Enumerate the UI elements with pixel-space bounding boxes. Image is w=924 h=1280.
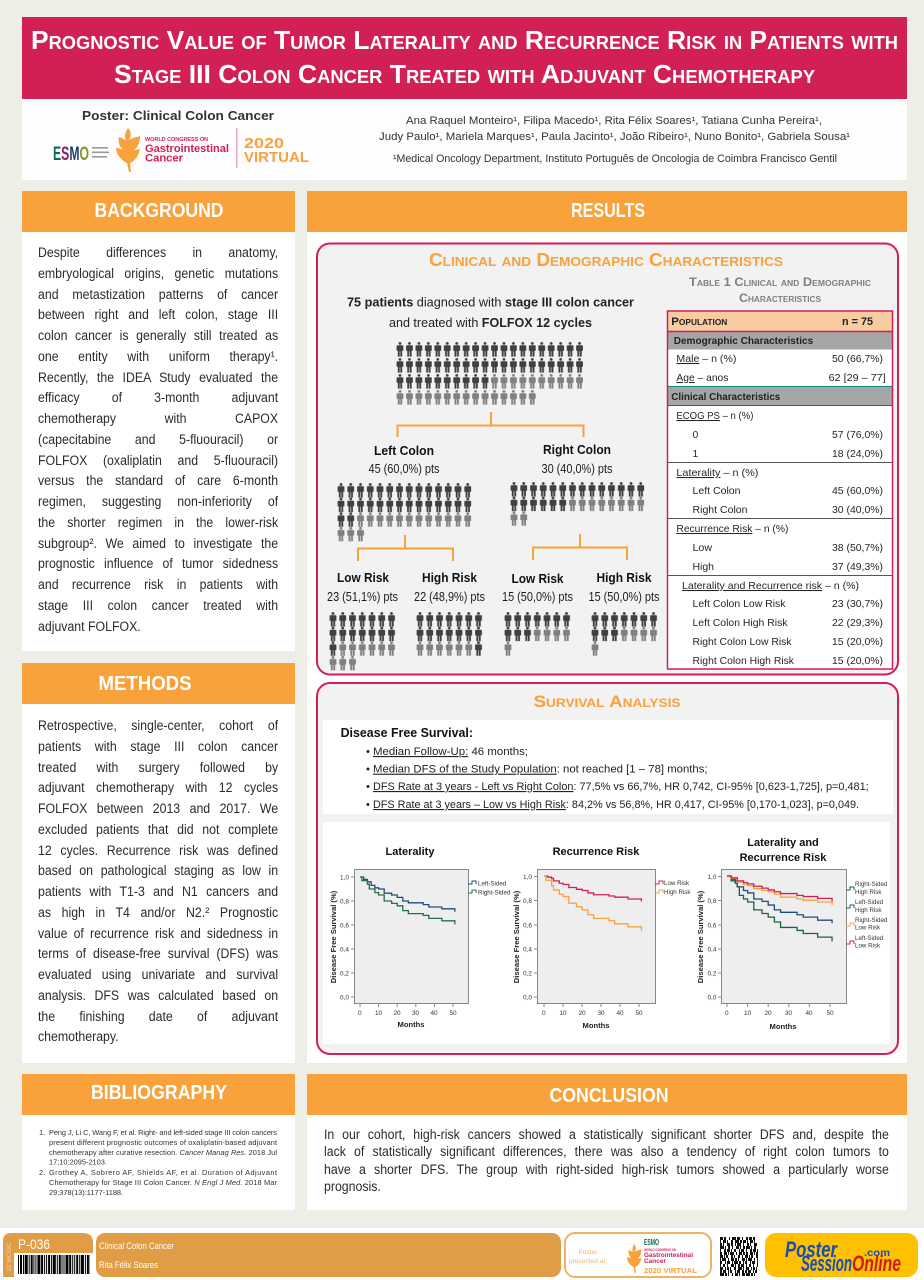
title banner: Stage III Colon Cancer Treated with Adjuvant Chemotherapy [114, 59, 815, 89]
right colon low risk [502, 572, 573, 656]
subheading: Clinical and Demographic Characteristics [429, 250, 783, 270]
chart: recurrence risk: 30 [598, 1010, 605, 1017]
logo: ESMO and World Congress: ESMO [53, 144, 89, 165]
panel: methods [22, 663, 295, 1063]
chart: recurrence risk: 10 [560, 1010, 567, 1017]
background text: and recurrence risk in patients with [38, 577, 278, 592]
chart: laterality and recurrence risk: High Risk [855, 907, 882, 914]
logo: ESMO and World Congress [53, 128, 309, 172]
authors: ¹Medical Oncology Department, Instituto Português de Oncologia de Coimbra Francisco Gentil [393, 153, 837, 165]
survival summary: DFS Rate at 3 years - Left vs Right Colon: 77,5% vs 66,7%, HR 0,742, CI-95% [0,623-1,725], p=0,481; [373, 781, 869, 793]
panel: survival analysis [317, 683, 898, 1054]
heading: bibliography: BIBLIOGRAPHY [91, 1082, 228, 1104]
table 1: Left Colon [692, 486, 741, 497]
chart: recurrence risk: Recurrence Risk [553, 846, 640, 858]
table 1: Male – n (%) [676, 354, 736, 365]
footer: PosterSessionOnline logo: .com [864, 1248, 890, 1259]
survival summary: • [366, 764, 370, 776]
footer: presented at logo: presented at: [569, 1258, 607, 1265]
patient summary: and treated with FOLFOX 12 cycles [389, 316, 592, 330]
table 1: Recurrence Risk – n (%) [676, 524, 788, 535]
patient summary [347, 296, 634, 330]
chart: laterality and recurrence risk: 20 [764, 1010, 772, 1017]
left colon high risk: High Risk [422, 571, 477, 585]
background text: Despite differences in anatomy, [38, 245, 278, 260]
table 1: 18 (24,0%) [832, 449, 883, 460]
chart: recurrence risk: 0,4 [523, 946, 532, 954]
panel: results [307, 191, 907, 1063]
footer: PosterSessionOnline logo [765, 1233, 918, 1277]
chart: recurrence risk: Low Risk [664, 880, 690, 887]
right colon low risk: 15 (50,0%) pts [502, 590, 573, 604]
chart: laterality: 0,8 [340, 898, 349, 906]
chart: recurrence risk: 0,0 [523, 994, 532, 1002]
table 1 [668, 311, 892, 669]
chart: laterality and recurrence risk: 0,8 [708, 898, 717, 905]
chart: recurrence risk: Months [582, 1021, 610, 1030]
references: 1. [39, 1128, 45, 1137]
chart: laterality and recurrence risk: 0,2 [708, 970, 717, 978]
chart: recurrence risk: 20 [578, 1010, 586, 1017]
table 1: ECOG PS – n (%) [676, 411, 753, 422]
chart: laterality and recurrence risk: High Risk [855, 889, 882, 896]
survival summary: Median Follow-Up: 46 months; [373, 746, 528, 758]
left colon low risk: 23 (51,1%) pts [327, 590, 398, 604]
table 1: 15 (20,0%) [832, 637, 883, 648]
references: present different prognostic outcomes of oxaliplatin-based adjuvant [49, 1138, 277, 1147]
background text: between right and left colon, stage III [38, 307, 278, 322]
table 1: 62 [29 – 77] [829, 373, 886, 384]
heading: methods: METHODS [98, 673, 192, 695]
left colon low risk: Low Risk [337, 571, 389, 585]
chart: laterality and recurrence risk: 0,4 [708, 946, 717, 954]
background text: (capecitabine and 5-fluouracil) or [38, 432, 278, 447]
footer: PosterSessionOnline logo: Online [852, 1251, 901, 1276]
table 1: 45 (60,0%) [832, 486, 883, 497]
background text: FOLFOX (oxaliplatin and 5-fluouracil) [38, 453, 278, 468]
left colon low risk [327, 571, 398, 670]
table 1: 30 (40,0%) [832, 505, 883, 516]
footer: presented at logo: 2020 VIRTUAL [644, 1266, 697, 1275]
footer: presented at logo: Gastrointestinal [644, 1253, 693, 1259]
footer: presented at logo: Cancer [644, 1259, 667, 1265]
table title [689, 275, 871, 305]
references: 17;10:2095-2103. [49, 1158, 107, 1166]
table 1: Right Colon High Risk [692, 656, 795, 667]
references: chemotherapy after curative resection. Cancer Manag Res. 2018 Jul [49, 1148, 277, 1157]
table 1: Low [692, 543, 713, 554]
footer [0, 1228, 924, 1280]
table 1: Left Colon High Risk [692, 618, 788, 629]
footer: topic and author [96, 1233, 561, 1277]
authors: Judy Paulo¹, Mariela Marques¹, Paula Jacinto¹, João Ribeiro¹, Nuno Bonito¹, Gabriela Sousa¹ [379, 131, 851, 143]
table 1: 23 (30,7%) [832, 599, 883, 610]
bracket: right colon risk [533, 534, 627, 560]
left colon label: 45 (60,0%) pts [368, 462, 440, 476]
panel: background [22, 191, 295, 651]
right colon label: 30 (40,0%) pts [542, 462, 612, 476]
survival summary [323, 720, 893, 814]
chart: recurrence risk: 0,8 [523, 898, 532, 905]
logo: ESMO and World Congress: 2020 [244, 135, 284, 152]
authors: Ana Raquel Monteiro¹, Filipa Macedo¹, Rita Félix Soares¹, Tatiana Cunha Pereira¹, [406, 115, 822, 127]
background text: stage III colon cancer treated with [38, 598, 278, 613]
background text: regimen, suggesting non-inferiority of [38, 494, 278, 509]
chart: laterality and recurrence risk: 0,0 [708, 994, 717, 1002]
background text: efficacy of 3-month adjuvant [38, 390, 278, 405]
chart: laterality and recurrence risk: Right-Sided [855, 917, 888, 924]
methods text: adjuvant chemotherapy with 12 cycles [38, 780, 278, 795]
chart: laterality and recurrence risk: 10 [744, 1010, 752, 1017]
chart: laterality: 50 [450, 1010, 457, 1017]
methods text: patients with T1-3 and N1 cancers and [38, 884, 278, 899]
table 1: Laterality and Recurrence risk – n (%) [682, 581, 859, 592]
methods text: FOLFOX between 2013 and 2017. We [38, 801, 278, 816]
methods text: value of recurrence risk and sidedness in [38, 926, 278, 941]
heading: background: BACKGROUND [94, 200, 224, 222]
logo: ESMO and World Congress: Cancer [145, 152, 184, 164]
table 1: Demographic Characteristics [674, 336, 813, 347]
right colon low risk: Low Risk [512, 572, 564, 586]
chart: laterality and recurrence risk: Laterality and [747, 837, 819, 849]
footer: poster id and barcode: 22 WCGIC [7, 1241, 13, 1271]
table 1: Age – anos [676, 373, 728, 384]
chart: laterality and recurrence risk: 40 [806, 1010, 813, 1017]
chart: recurrence risk: Disease Free Survival (%) [512, 890, 521, 983]
survival summary: Median DFS of the Study Population: not reached [1 – 78] months; [373, 764, 708, 776]
table 1: Laterality – n (%) [676, 468, 758, 479]
chart: recurrence risk: High Risk [664, 889, 691, 896]
references: Peng J, Li C, Wang F, et al. Right- and left-sided stage III colon cancers [49, 1128, 277, 1137]
background text: the shorter regimen in the lower-risk [38, 515, 278, 530]
footer: PosterSessionOnline logo: Poster [785, 1237, 838, 1262]
footer: poster id and barcode: P-036 [18, 1237, 50, 1252]
methods text: analysis. DFS was calculated based on [38, 988, 278, 1003]
chart: laterality and recurrence risk: 1,0 [708, 874, 717, 881]
footer: presented at logo: ESMO [644, 1238, 659, 1247]
chart: laterality and recurrence risk: Left-Sided [855, 935, 884, 942]
chart: laterality and recurrence risk: Left-Sided [855, 899, 884, 906]
chart: laterality: 20 [394, 1010, 401, 1017]
chart: recurrence risk: 50 [636, 1010, 643, 1017]
right colon label [542, 443, 612, 476]
charts background [323, 822, 890, 1044]
table 1: 1 [692, 449, 698, 460]
chart: laterality: 1,0 [340, 874, 349, 882]
chart: laterality: Right-Sided [478, 890, 511, 896]
right colon high risk: High Risk [596, 571, 652, 585]
chart: laterality: 0 [358, 1010, 362, 1017]
left colon high risk: 22 (48,9%) pts [414, 590, 485, 604]
chart: laterality: Laterality [386, 846, 435, 858]
table 1: Right Colon [692, 505, 748, 516]
logo: ESMO and World Congress: VIRTUAL [244, 149, 309, 166]
methods text: 12 cycles. Recurrence risk was defined [38, 843, 278, 858]
chart: laterality: Months [398, 1020, 424, 1029]
table 1: High [692, 562, 714, 573]
patient summary: 75 patients diagnosed with stage III colon cancer [347, 296, 634, 310]
methods text: terms of disease-free survival (DFS) was [38, 946, 278, 961]
left colon label: Left Colon [374, 444, 434, 458]
chart: laterality: 0,0 [340, 994, 349, 1002]
table 1: 0 [692, 430, 698, 441]
chart: laterality: 0,4 [340, 946, 349, 954]
methods text [38, 716, 278, 1052]
chart: recurrence risk [512, 846, 691, 1030]
chart: laterality and recurrence risk: Disease Free Survival (%) [696, 890, 705, 983]
chart: laterality and recurrence risk: 30 [785, 1010, 793, 1017]
panel: conclusion [307, 1074, 907, 1210]
survival summary: • [366, 799, 370, 811]
table 1: 57 (76,0%) [832, 430, 883, 441]
chart: laterality [329, 846, 511, 1029]
background text: embryological origins, genetic mutations [38, 266, 278, 281]
chart: recurrence risk: 40 [616, 1010, 624, 1017]
right colon label: Right Colon [543, 443, 611, 457]
left colon high risk [414, 571, 485, 656]
table 1: 50 (66,7%) [832, 354, 883, 365]
chart: laterality and recurrence risk: Recurrence Risk [740, 852, 827, 864]
panel: clinical and demographic characteristics [317, 244, 898, 674]
conclusion text: lack of statistically significant differences, there was also a tendency of right colon tumors to [324, 1144, 889, 1159]
footer: presented at logo [565, 1233, 711, 1277]
title banner [22, 17, 907, 99]
references: 2. [39, 1168, 45, 1177]
chart: laterality: 0,6 [340, 922, 349, 930]
background text: versus the standard of care 6-month [38, 473, 278, 488]
survival summary: • [366, 781, 370, 793]
heading: conclusion: CONCLUSION [550, 1085, 668, 1107]
table title: Characteristics [739, 291, 822, 305]
chart: laterality: 40 [430, 1010, 438, 1017]
right colon high risk [588, 571, 660, 656]
table 1: n = 75 [842, 316, 873, 328]
references: Chemotherapy for Stage III Colon Cancer. N Engl J Med. 2018 Mar [49, 1178, 278, 1187]
background text [38, 243, 278, 639]
footer: QR code [720, 1238, 758, 1274]
chart: laterality and recurrence risk [696, 837, 888, 1031]
chart: laterality and recurrence risk: Low Risk [855, 924, 881, 932]
table 1: 38 (50,7%) [832, 543, 883, 554]
table 1: Right Colon Low Risk [692, 637, 792, 648]
methods text: evaluated using univariate and survival [38, 967, 278, 982]
background text: subgroup². We aimed to investigate the [38, 536, 278, 551]
references [39, 1128, 278, 1197]
logo: ESMO and World Congress: WORLD CONGRESS ON [145, 137, 208, 143]
methods text: excluded patients that did not complete [38, 822, 278, 837]
footer: presented at logo: Poster [579, 1249, 598, 1256]
table 1: 22 (29,3%) [832, 618, 883, 629]
chart: laterality: Disease Free Survival (%) [329, 890, 338, 983]
survival summary: Disease Free Survival: [341, 725, 473, 740]
footer: presented at logo: WORLD CONGRESS ON [644, 1248, 676, 1252]
chart: laterality and recurrence risk: 50 [826, 1010, 834, 1017]
footer: topic and author: Rita Félix Soares [99, 1260, 158, 1271]
panel: bibliography [22, 1074, 295, 1210]
methods text: based on pathological staging as low in [38, 863, 278, 878]
bracket: left colon risk [358, 535, 453, 561]
background text: and metastization patterns of cancer [38, 287, 278, 302]
icon array: 75 patients [396, 342, 585, 406]
logo: ESMO and World Congress: Gastrointestinal [145, 143, 229, 155]
header: poster category, logos and authors [22, 99, 907, 180]
table 1: Left Colon Low Risk [692, 599, 786, 610]
chart: laterality and recurrence risk: Right-Sided [855, 881, 888, 888]
icon array: left colon [337, 483, 474, 541]
subheading: Survival Analysis [534, 693, 680, 711]
survival summary: • [366, 746, 370, 758]
background text: chemotherapy with CAPOX [38, 411, 278, 426]
icon array: right colon [510, 482, 646, 526]
footer: PosterSessionOnline logo: Session [801, 1251, 852, 1276]
chart: laterality: Left-Sided [478, 880, 507, 888]
authors [379, 115, 851, 165]
table 1: 15 (20,0%) [832, 656, 883, 667]
methods text: the finishing date of adjuvant [38, 1009, 278, 1024]
chart: recurrence risk: 1,0 [523, 874, 532, 881]
title banner: Prognostic Value of Tumor Laterality and Recurrence Risk in Patients with [31, 25, 898, 55]
chart: laterality and recurrence risk: Months [770, 1022, 796, 1031]
chart: laterality: 0,2 [340, 970, 349, 978]
footer: topic and author: Clinical Colon Cancer [99, 1241, 174, 1252]
survival summary: DFS Rate at 3 years – Low vs High Risk: 84,2% vs 56,8%, HR 0,417, CI-95% [0,170-1,023], p=0,049. [373, 799, 859, 811]
methods text: Retrospective, single-center, cohort of [38, 718, 278, 733]
table title: Table 1 Clinical and Demographic [689, 275, 871, 289]
footer: poster id and barcode [3, 1233, 93, 1277]
references: 29;378(13):1177-1188. [49, 1188, 123, 1197]
chart: recurrence risk: 0 [542, 1010, 546, 1017]
conclusion text: prognosis. [324, 1179, 381, 1194]
chart: laterality and recurrence risk: 0 [725, 1010, 729, 1017]
left colon label [368, 444, 440, 476]
background text: colon cancer is generally still treated as [38, 328, 278, 343]
table 1: 37 (49,3%) [832, 562, 883, 573]
right colon high risk: 15 (50,0%) pts [588, 590, 660, 604]
bracket: split by colon side [398, 412, 584, 437]
methods text: treated with surgery followed by [38, 760, 278, 775]
background text: one entity with uniform therapy¹. [38, 349, 278, 364]
table 1: Clinical Characteristics [671, 392, 780, 403]
methods text: patients with stage III colon cancer [38, 739, 278, 754]
chart: recurrence risk: 0,2 [523, 970, 532, 978]
chart: laterality: 30 [412, 1010, 420, 1017]
poster category: Poster: Clinical Colon Cancer [82, 108, 274, 123]
chart: laterality and recurrence risk: 0,6 [708, 922, 717, 930]
background text: adjuvant FOLFOX. [38, 619, 141, 634]
table 1: Population [671, 316, 728, 328]
conclusion text: have a shorter DFS. The group with right-sided high-risk tumors showed a particularly worse [324, 1162, 889, 1177]
background text: prognostic influence of tumor sidedness [38, 556, 278, 571]
chart: laterality and recurrence risk: Low Risk [855, 942, 881, 950]
background text: Recently, the IDEA Study evaluated the [38, 370, 278, 385]
methods text: as high in T4 and/or N2.² Prognostic [38, 905, 278, 920]
methods text: chemotherapy. [38, 1029, 119, 1044]
conclusion text [324, 1126, 889, 1198]
heading: results: RESULTS [571, 200, 645, 222]
references: Grothey A, Sobrero AF, Shields AF, et al. Duration of Adjuvant [49, 1168, 277, 1177]
conclusion text: In our cohort, high-risk cancers showed a statistically significant shorter DFS and, despite the [324, 1127, 889, 1142]
chart: recurrence risk: 0,6 [523, 922, 532, 930]
chart: laterality: 10 [375, 1010, 383, 1017]
